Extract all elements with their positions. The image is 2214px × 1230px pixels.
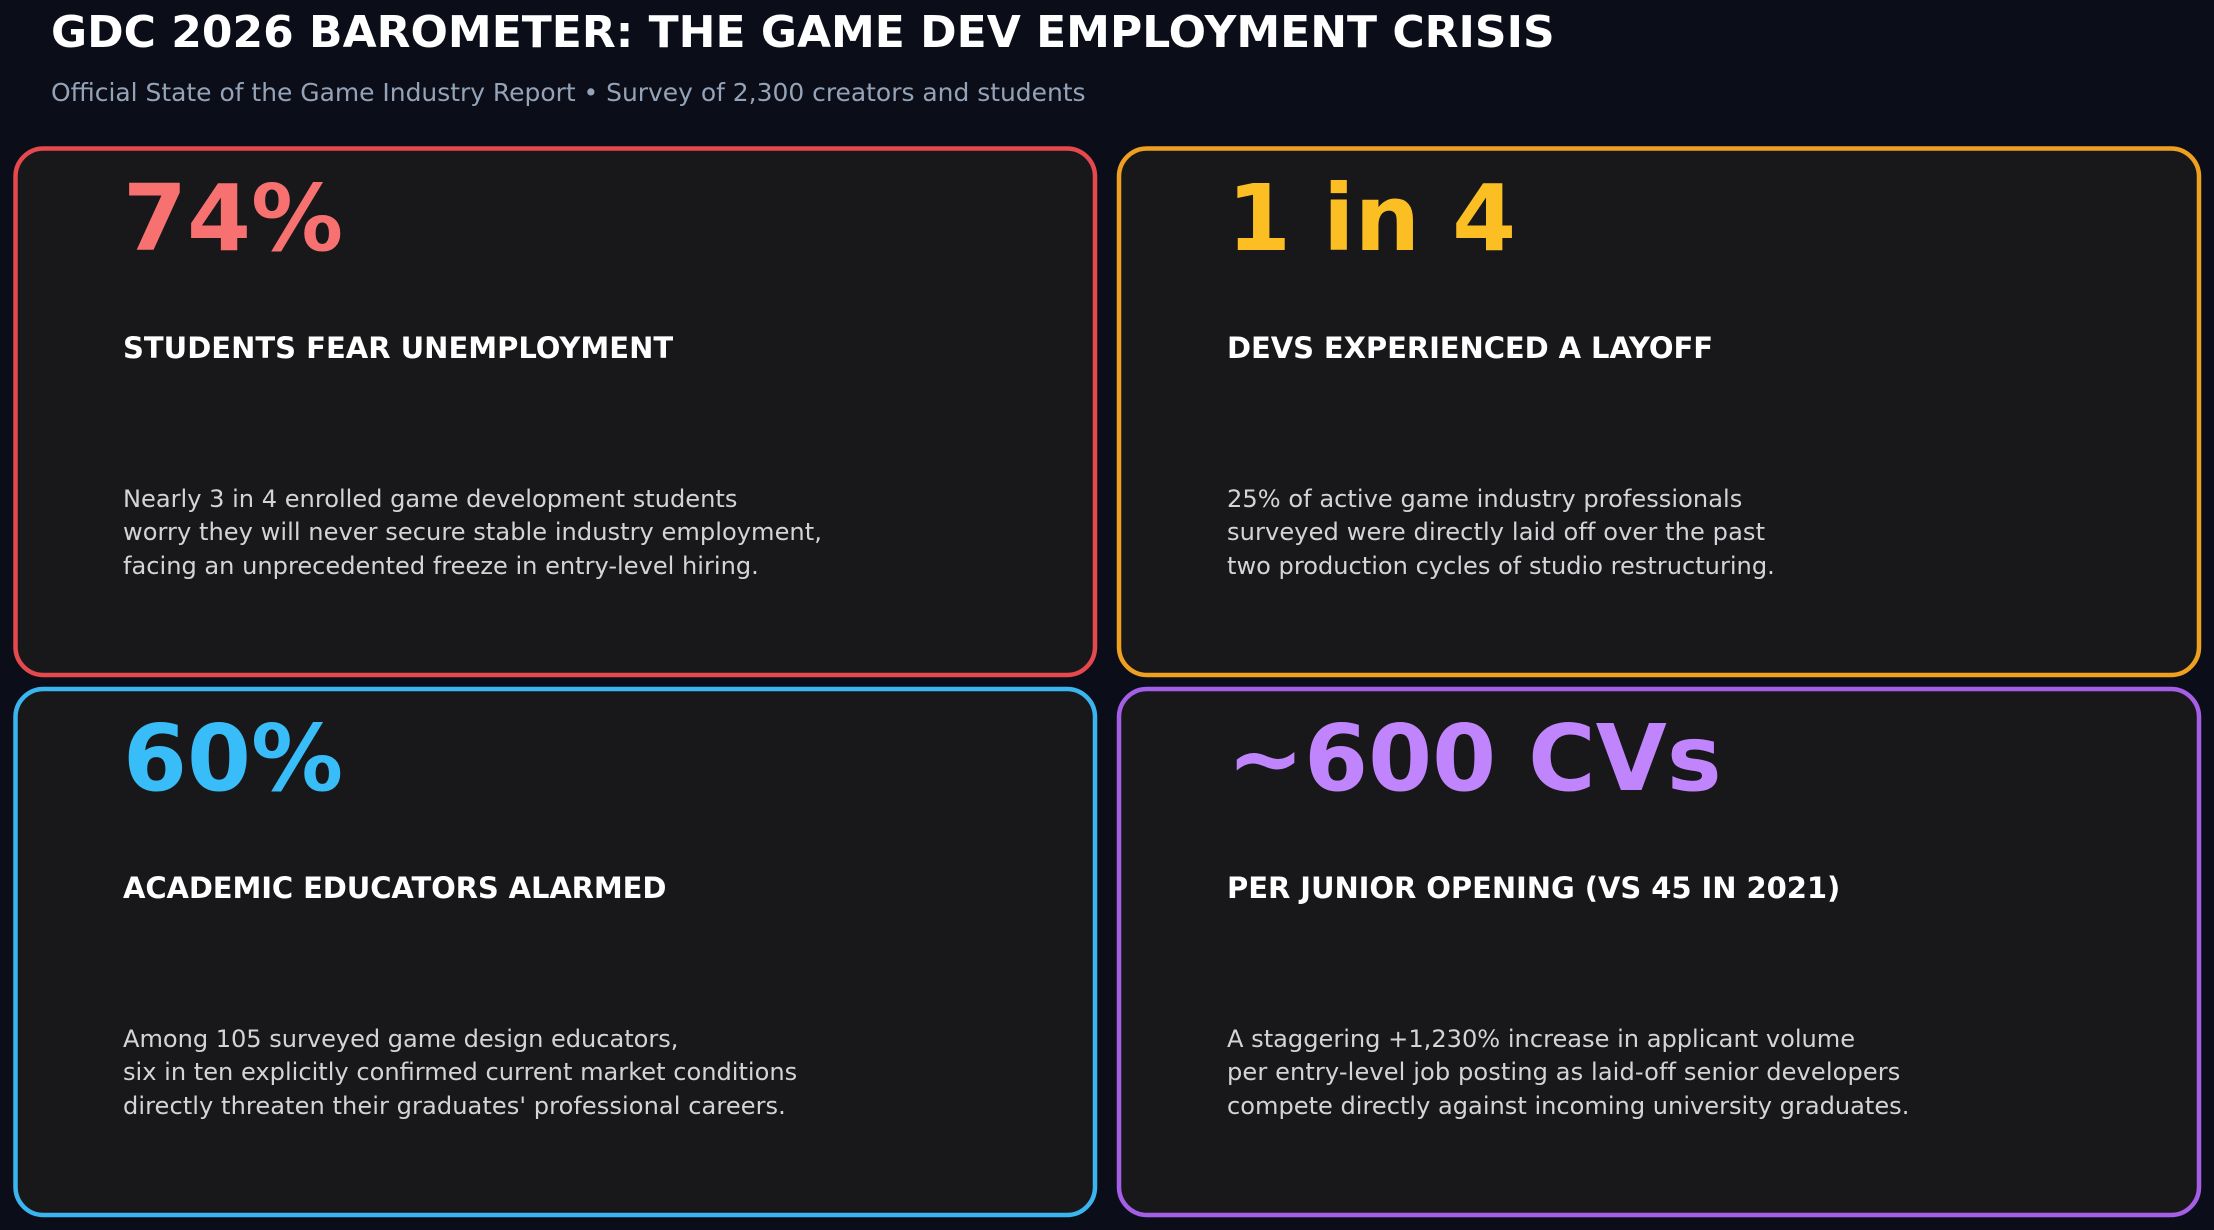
stat: 74%: 74% [123,165,343,272]
stat: 1 in 4: 1 in 4 [1227,165,1516,272]
body: layoffs: 25% of active game industry professionals [1227,485,1742,513]
body: layoffs: surveyed were directly laid off over the past [1227,518,1765,546]
body: students: Nearly 3 in 4 enrolled game development students [123,485,737,513]
body: students: facing an unprecedented freeze in entry-level hiring. [123,552,759,580]
panel: students fear unemployment [16,148,1095,675]
panel: layoffs [1119,148,2199,675]
body: educators: directly threaten their graduates' professional careers. [123,1092,786,1120]
body: educators [123,1025,797,1120]
body: CVs: compete directly against incoming university graduates. [1227,1092,1909,1120]
body: educators: Among 105 surveyed game design educators, [123,1025,678,1053]
stat: 60%: 60% [123,705,343,812]
body: CVs [1227,1025,1909,1120]
panel: educators [16,689,1095,1215]
body: layoffs: two production cycles of studio restructuring. [1227,552,1775,580]
heading: educators: ACADEMIC EDUCATORS ALARMED [123,871,666,905]
panel: CVs per opening [1119,689,2199,1215]
heading: students: STUDENTS FEAR UNEMPLOYMENT [123,331,673,365]
body: CVs: per entry-level job posting as laid-off senior developers [1227,1058,1900,1086]
body: CVs: A staggering +1,230% increase in applicant volume [1227,1025,1855,1053]
title: GDC 2026 BAROMETER: THE GAME DEV EMPLOYMENT CRISIS [51,7,1555,58]
body: students: worry they will never secure stable industry employment, [123,518,822,546]
body: educators: six in ten explicitly confirmed current market conditions [123,1058,797,1086]
body: layoffs [1227,485,1775,580]
body: students [123,485,822,580]
heading: layoffs: DEVS EXPERIENCED A LAYOFF [1227,331,1713,365]
heading: CVs: PER JUNIOR OPENING (VS 45 IN 2021) [1227,871,1840,905]
subtitle: Official State of the Game Industry Report • Survey of 2,300 creators and students [51,78,1086,107]
stat: ~600 CVs: ~600 CVs [1227,705,1722,812]
